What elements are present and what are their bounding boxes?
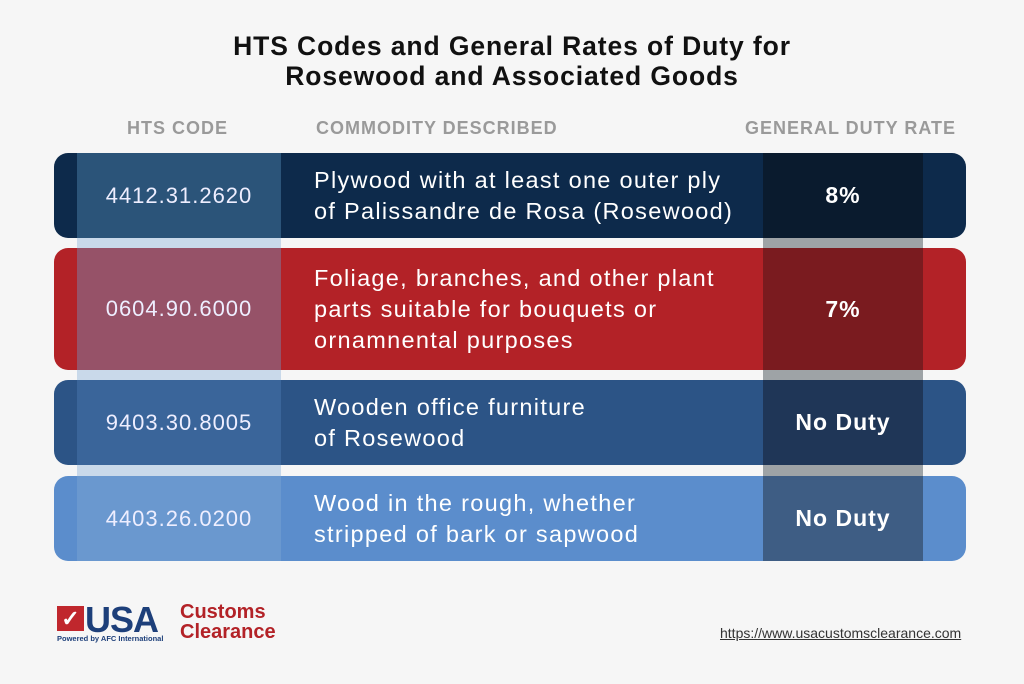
row 4: No Duty: [795, 505, 891, 531]
row 1: of Palissandre de Rosa (Rosewood): [314, 198, 733, 224]
duty column strip: [763, 160, 923, 556]
url: https://www.usacustomsclearance.com: [720, 625, 961, 641]
logo: Clearance: [180, 621, 276, 643]
row 2: parts suitable for bouquets or: [314, 296, 657, 322]
logo: Customs: [180, 601, 266, 623]
row 3: Wooden office furniture: [314, 394, 586, 420]
row 2: Foliage, branches, and other plant: [314, 264, 715, 290]
header: duty: GENERAL DUTY RATE: [745, 118, 956, 138]
row 4: 4403.26.0200: [106, 506, 252, 530]
header: hts code: HTS CODE: [127, 118, 228, 138]
title: [233, 31, 791, 91]
row 3: 9403.30.8005: [106, 410, 252, 434]
code column strip: [77, 160, 281, 556]
icon: check box: [57, 606, 84, 631]
row 2: 7%: [825, 296, 861, 322]
icon: check box: ✓: [61, 606, 80, 631]
row 4: [54, 476, 966, 561]
row 2: ornamnental purposes: [314, 326, 574, 352]
row 1: Plywood with at least one outer ply: [314, 166, 721, 192]
row 1: 8%: [825, 182, 861, 208]
row 1: 4412.31.2620: [106, 182, 252, 208]
row 3: [54, 380, 966, 465]
row 2: [54, 248, 966, 370]
title: HTS Codes and General Rates of Duty for: [233, 31, 791, 61]
row 4: Wood in the rough, whether: [314, 490, 636, 516]
header: commodity: COMMODITY DESCRIBED: [316, 118, 558, 138]
row 1: [54, 153, 966, 238]
logo: Powered by AFC International: [57, 634, 163, 643]
row 3: No Duty: [795, 409, 891, 435]
logo: USA: [85, 599, 158, 640]
logo: [57, 599, 276, 643]
row 4: stripped of bark or sapwood: [314, 520, 639, 546]
title: Rosewood and Associated Goods: [285, 61, 739, 91]
row 3: of Rosewood: [314, 424, 465, 450]
row 2: 0604.90.6000: [106, 296, 252, 321]
